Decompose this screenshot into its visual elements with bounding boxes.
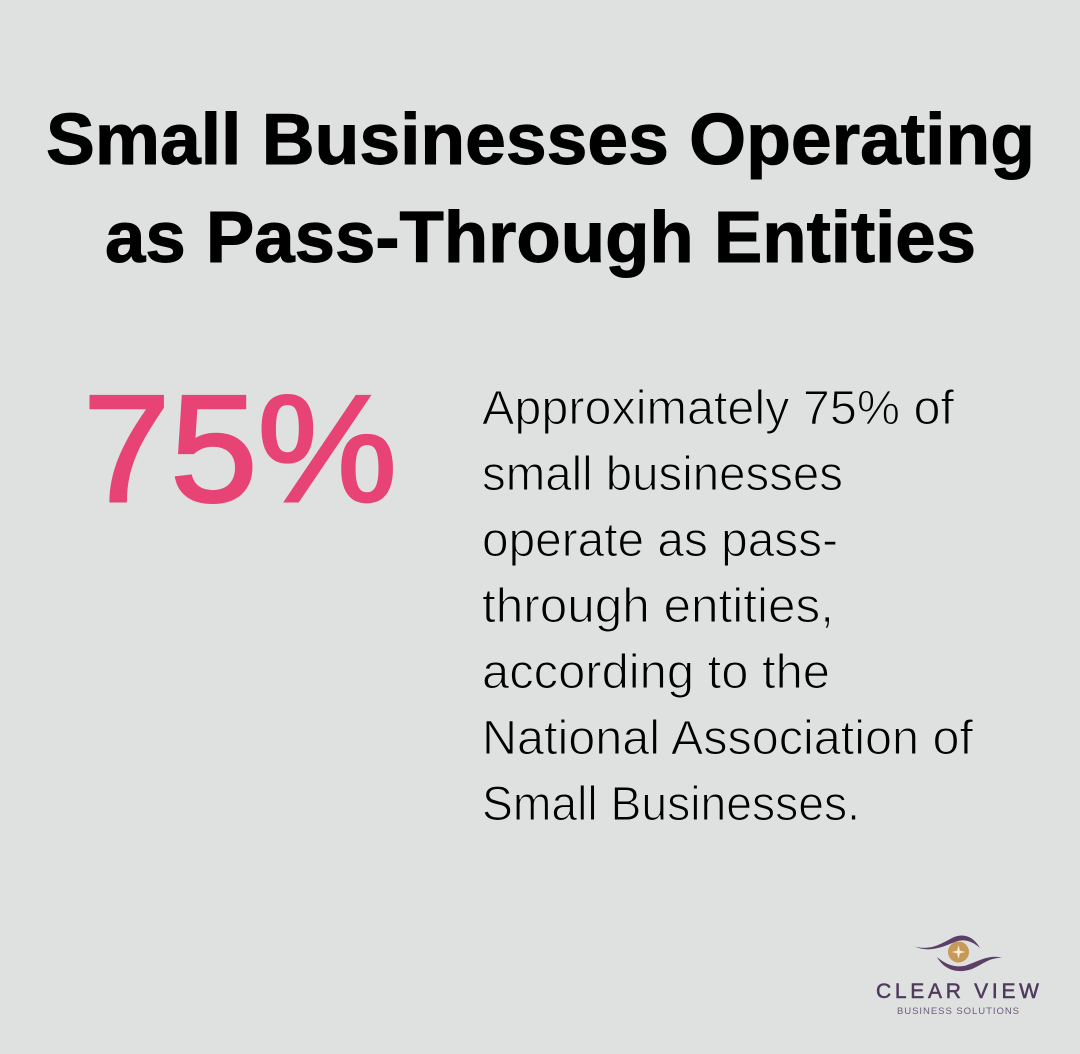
title: as Pass-Through Entities	[105, 198, 976, 278]
title: Small Businesses Operating	[46, 100, 1035, 180]
description text: Small Businesses.	[482, 778, 860, 831]
logo wordmark: CLEAR VIEW	[876, 980, 1039, 1003]
description text: small businesses	[482, 448, 843, 501]
description text: National Association of	[482, 712, 974, 765]
logo: Clear View Business Solutions	[876, 935, 1039, 1017]
description text: according to the	[482, 646, 830, 699]
logo tagline: BUSINESS SOLUTIONS	[897, 1006, 1019, 1017]
icon: eye with star	[914, 935, 1002, 971]
description text: Approximately 75% of	[482, 382, 955, 435]
description text: through entities,	[482, 580, 834, 633]
description text: operate as pass-	[482, 514, 838, 567]
title	[46, 100, 1035, 278]
big statistic: 75%: 75%	[83, 364, 397, 534]
description text	[482, 382, 974, 831]
